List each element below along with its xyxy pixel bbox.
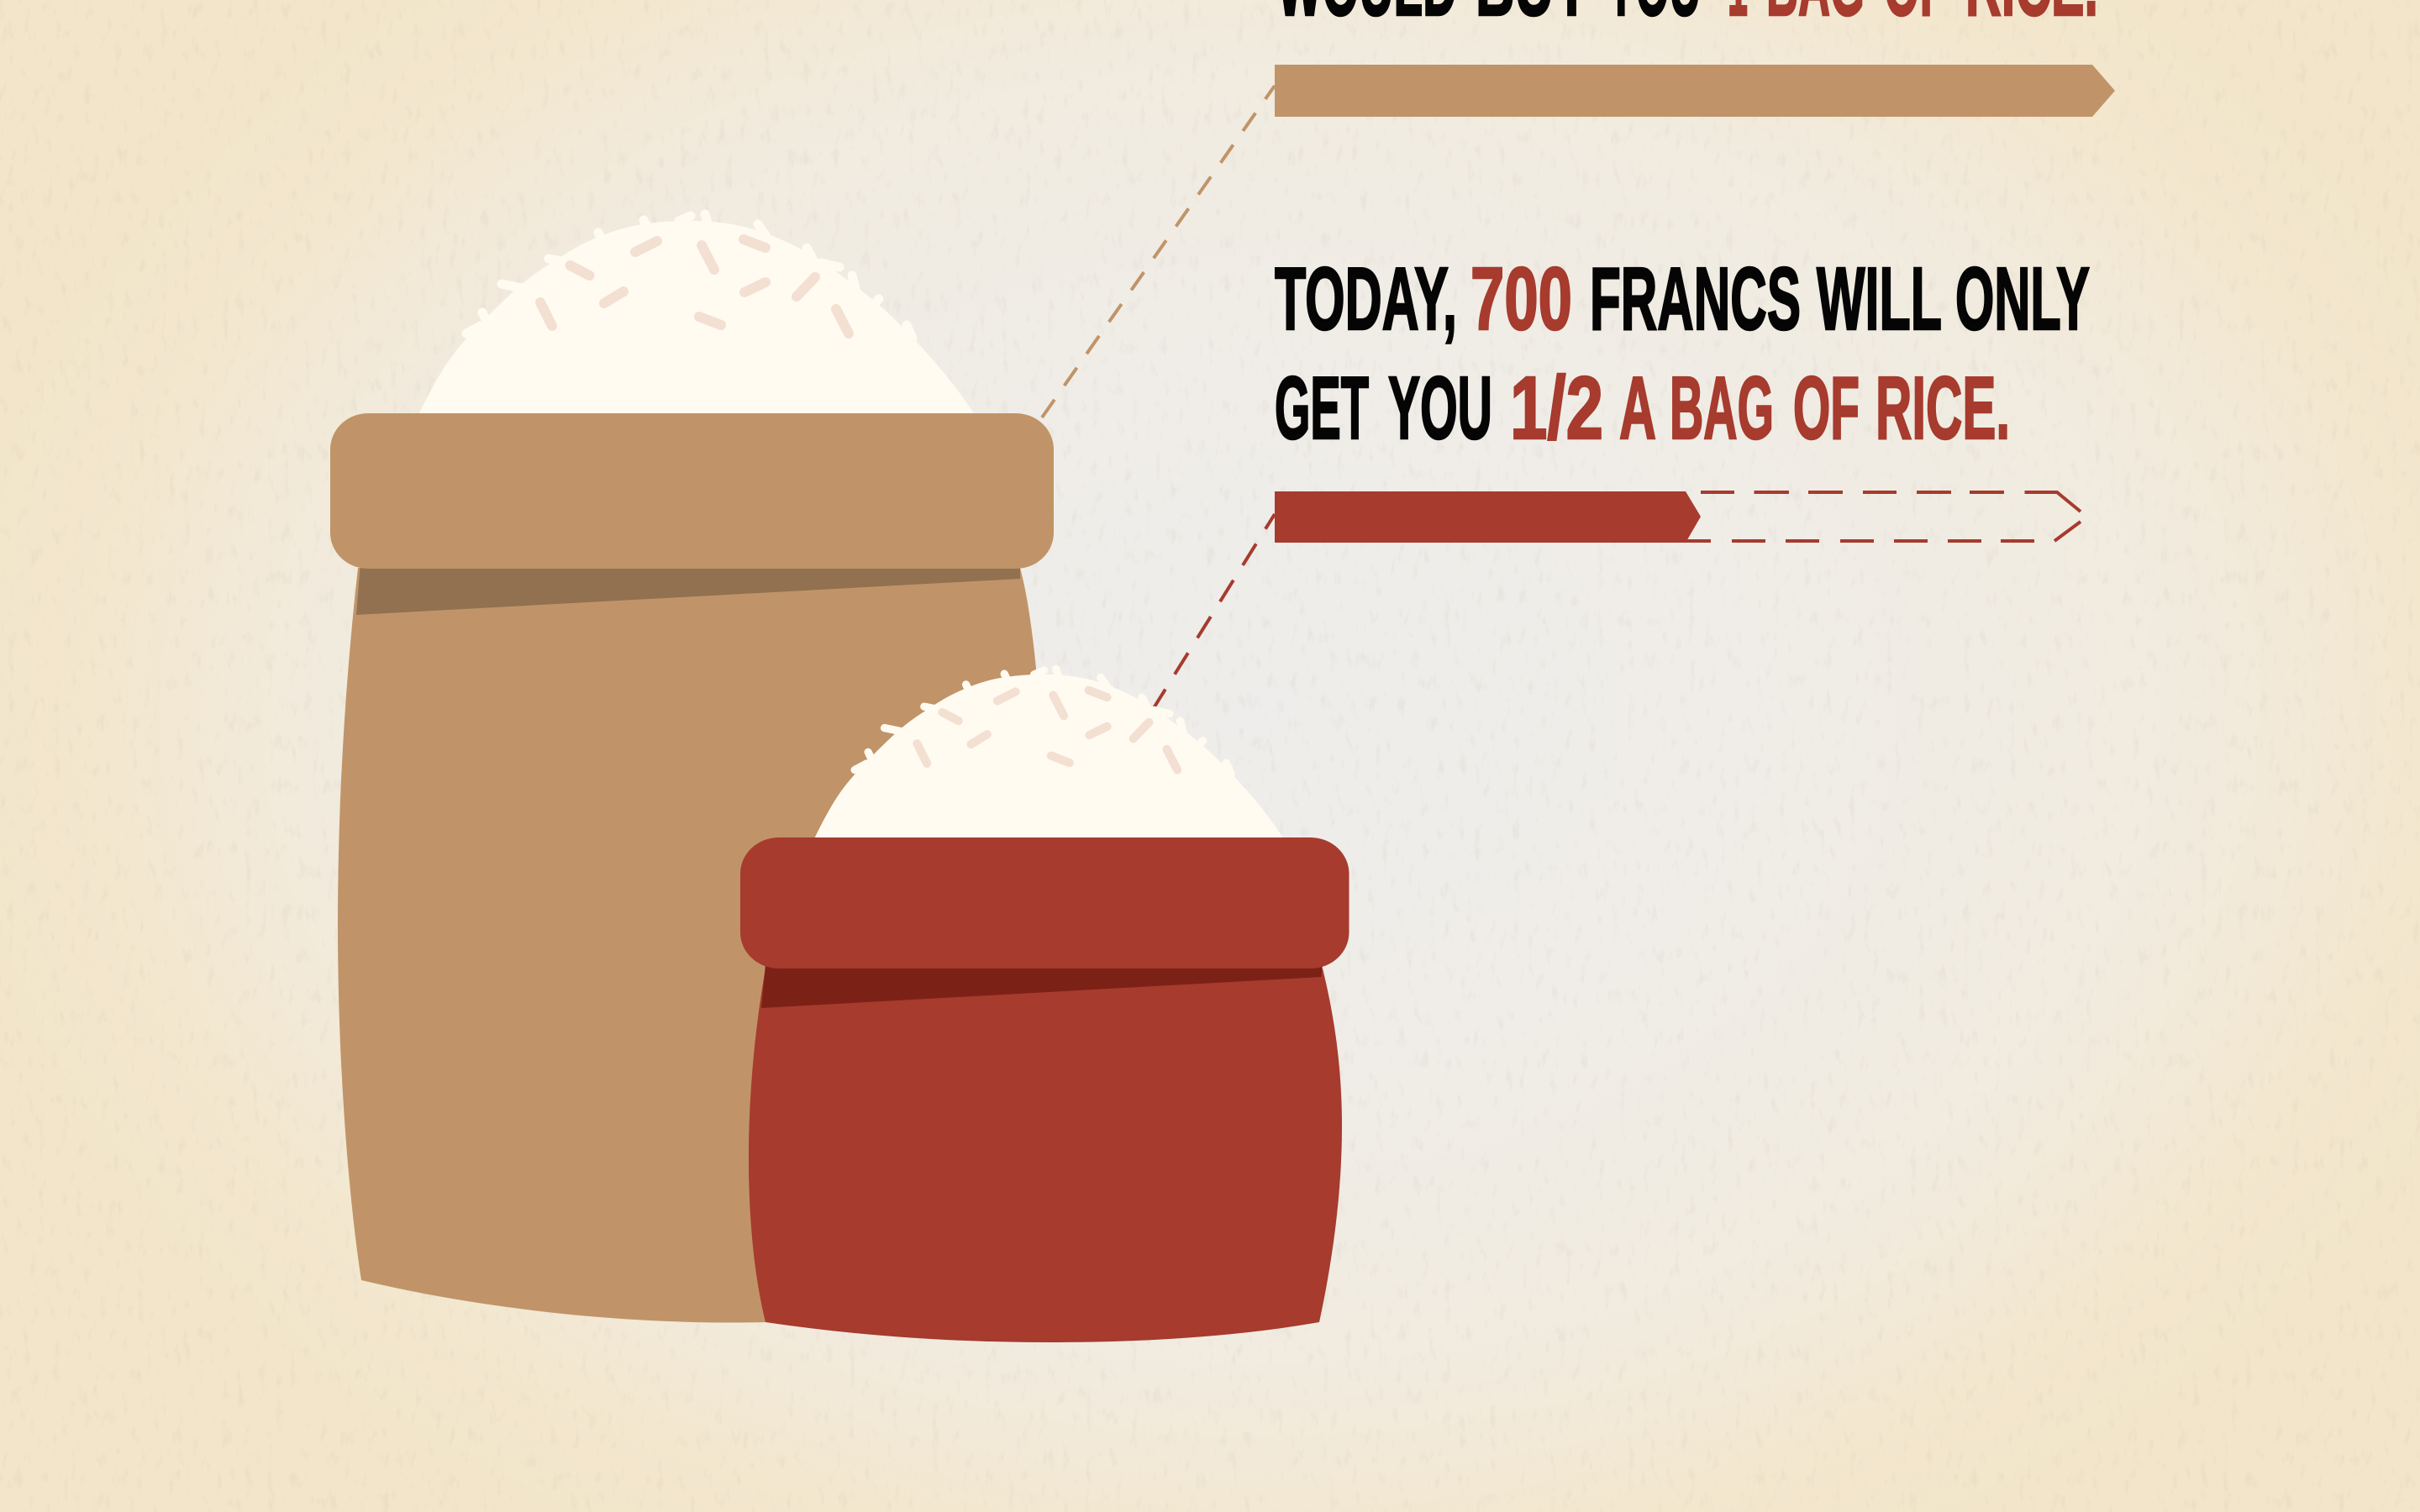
text: today's statement: 1/2 — [1510, 359, 1603, 458]
small bag collar — [740, 837, 1349, 969]
text: today's statement: A — [1619, 359, 1656, 458]
icon: big tan rice bag — [330, 214, 1054, 1323]
text: today's statement: RICE. — [1876, 359, 2010, 458]
text: today's statement: BAG — [1670, 359, 1774, 458]
text: today's statement — [1275, 249, 2090, 458]
small bag rice mound — [814, 669, 1284, 839]
text: today's statement: ONLY — [1955, 249, 2090, 349]
bar: half bag arrow with dashed outline — [1275, 491, 2081, 543]
icon: small red rice bag — [740, 669, 1349, 1342]
big bag shadow — [356, 563, 1020, 615]
small bag body — [749, 969, 1342, 1342]
bar: full bag arrow — [1275, 65, 2115, 117]
text: today's statement: OF — [1793, 359, 1860, 458]
big bag collar — [330, 413, 1054, 569]
text: today's statement: YOU — [1388, 359, 1492, 458]
text: today's statement: FRANCS — [1590, 249, 1801, 349]
text: today's statement: 700 — [1470, 249, 1572, 349]
text: first statement (cropped at top) — [1277, 0, 2098, 34]
text: today's statement: GET — [1275, 359, 1369, 458]
big bag rice mound — [418, 214, 975, 415]
text: today's statement: WILL — [1817, 249, 1942, 349]
big bag body — [338, 568, 1050, 1323]
leader line: small bag to red bar — [1152, 514, 1275, 711]
leader line: big bag to tan bar — [1042, 86, 1275, 417]
text: today's statement: TODAY, — [1275, 249, 1457, 349]
small bag shadow — [761, 964, 1323, 1008]
